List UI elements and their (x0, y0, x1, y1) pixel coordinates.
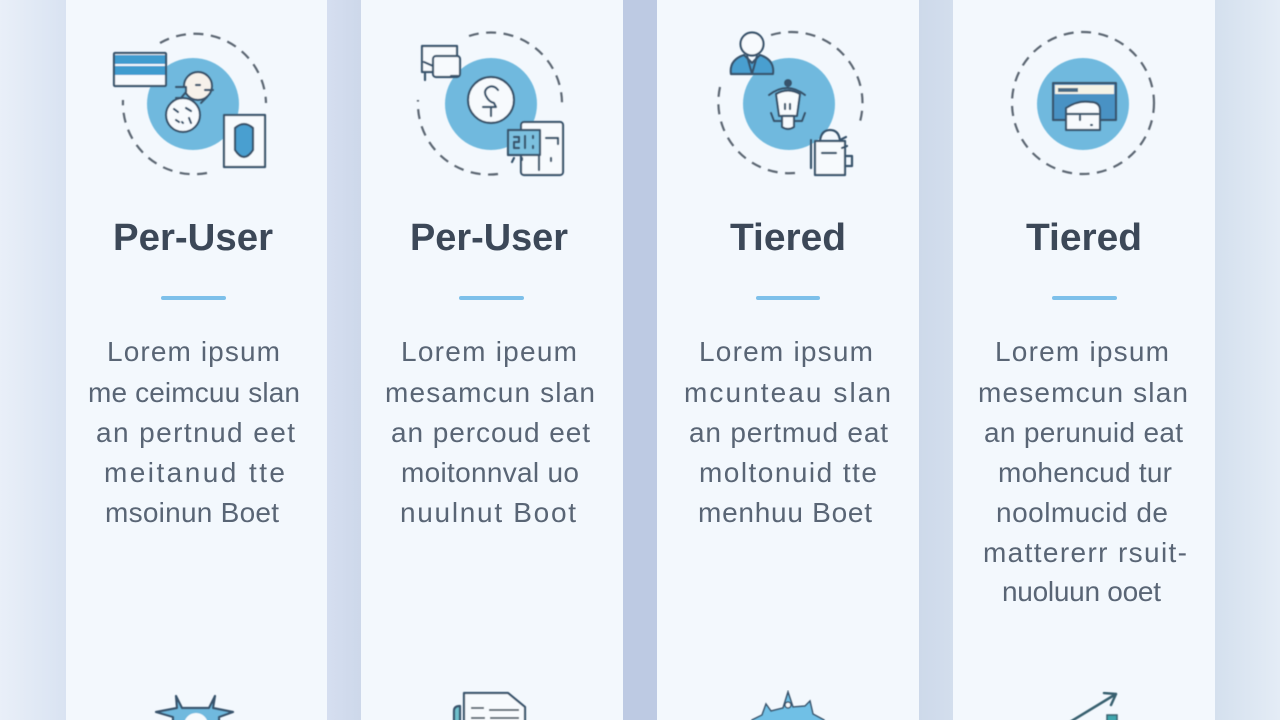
heading: Per-User: Per-User (410, 217, 568, 259)
text block: Lorem ipsum (699, 336, 873, 367)
text block (978, 336, 1188, 607)
accent rule (459, 296, 524, 300)
icon: dollar coin, monitor and devices in dashed ring (418, 33, 563, 175)
icon: person, face and bag in dashed ring (718, 32, 863, 175)
panel: Per-User second column (361, 0, 623, 720)
icon: gear, bottom (156, 696, 233, 720)
icon: card, coins and mouse in dashed ring (114, 34, 266, 174)
text block (385, 336, 595, 528)
icon: document, bottom (454, 693, 525, 720)
text block: menhuu Boet (698, 497, 872, 528)
text block: moitonnval uo (401, 457, 579, 488)
panel: Per-User first column (66, 0, 327, 720)
panel: Tiered first column (657, 0, 919, 720)
text block (88, 336, 300, 528)
accent rule (1052, 296, 1117, 300)
text block: noolmucid de (996, 497, 1168, 528)
text block: meitanud tte (104, 457, 285, 488)
accent rule (161, 296, 226, 300)
icon: browser window and box in dashed ring (1012, 32, 1154, 174)
panel: Tiered second column (953, 0, 1215, 720)
icon: spiked badge, bottom (752, 692, 824, 720)
text block: nuulnut Boot (400, 497, 576, 528)
text block: an percoud eet (391, 417, 590, 448)
text block: me ceimcuu slan (88, 377, 300, 408)
text block: an pertnud eet (96, 417, 295, 448)
text block: mattererr rsuit- (983, 537, 1187, 568)
text block: msoinun Boet (105, 497, 279, 528)
heading: Tiered: Tiered (1026, 217, 1142, 259)
text block: an pertmud eat (689, 417, 888, 448)
heading: Per-User: Per-User (113, 217, 273, 259)
text block: Lorem ipsum (107, 336, 280, 367)
text block: an perunuid eat (984, 417, 1183, 448)
text block: Lorem ipeum (401, 336, 577, 367)
text block: nuoluun ooet (1002, 576, 1161, 607)
text block: mesemcun slan (978, 377, 1188, 408)
icon: growth arrow and bar, bottom (1070, 693, 1117, 720)
text block: mcunteau slan (684, 377, 891, 408)
heading: Tiered: Tiered (730, 217, 846, 259)
text block (684, 336, 891, 528)
text block: Lorem ipsum (995, 336, 1169, 367)
text block: moltonuid tte (699, 457, 877, 488)
accent rule (756, 296, 820, 300)
text block: mesamcun slan (385, 377, 595, 408)
text block: mohencud tur (998, 457, 1172, 488)
